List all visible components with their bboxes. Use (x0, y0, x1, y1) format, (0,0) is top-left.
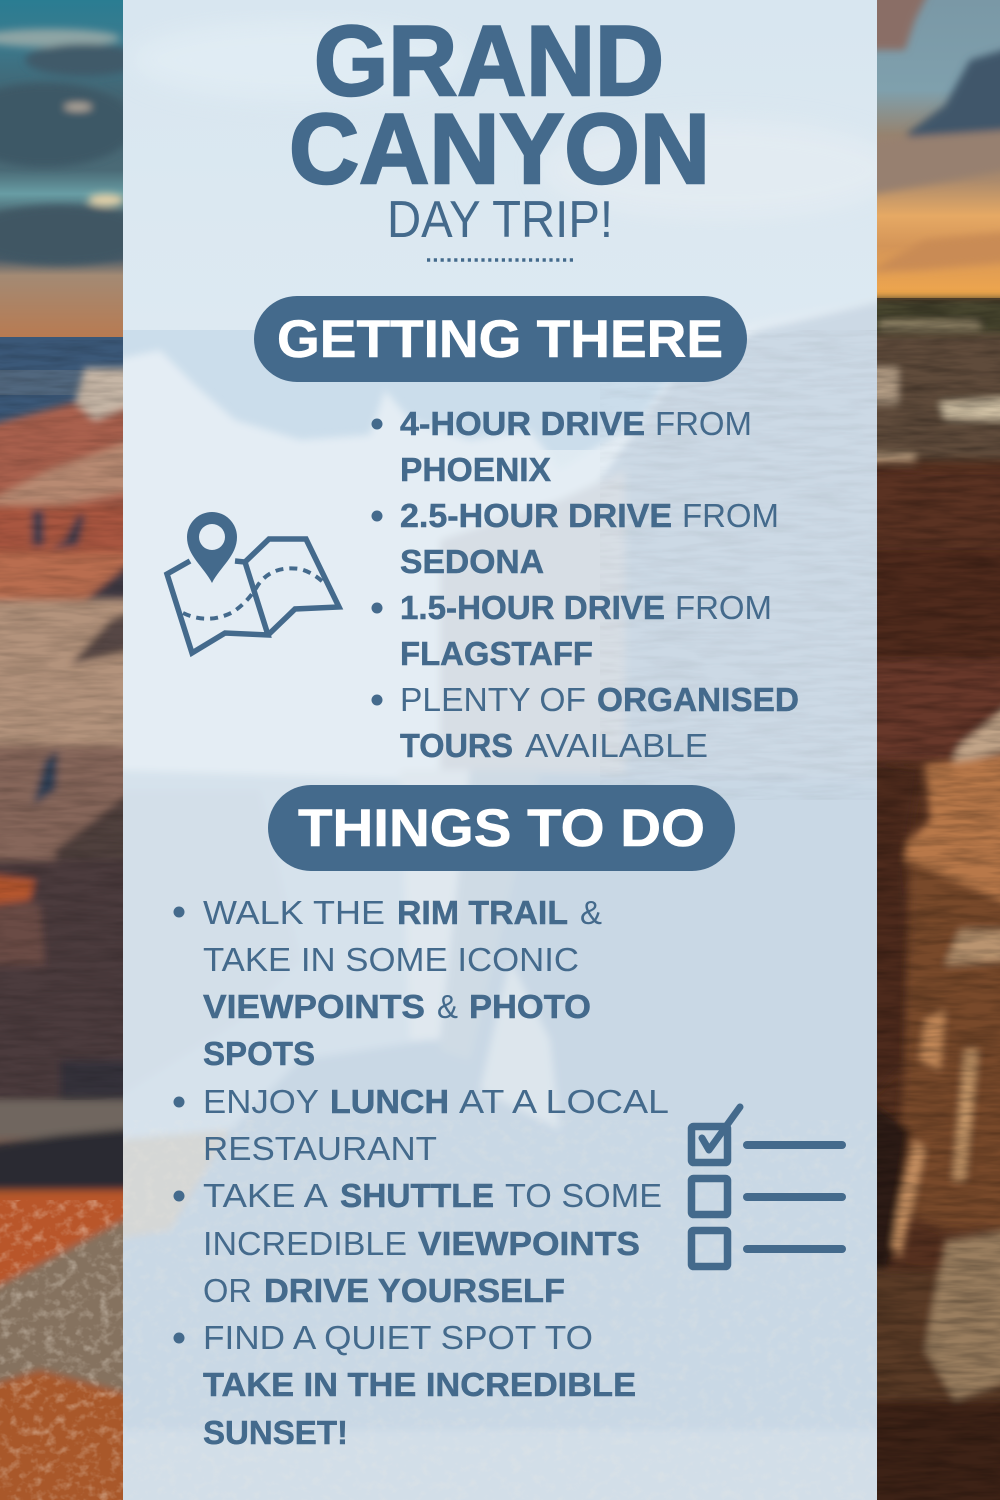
list: activities: DRIVE YOURSELF (264, 1272, 565, 1309)
list: activities: RESTAURANT (203, 1130, 437, 1167)
list: driving times (372, 405, 799, 764)
list: driving times: SEDONA (400, 543, 544, 580)
list: driving times: 4-HOUR DRIVE (400, 405, 645, 442)
list: driving times: AVAILABLE (525, 727, 708, 764)
title (289, 5, 710, 204)
photo strip: left canyon view (0, 0, 123, 1500)
title: CANYON (289, 93, 710, 204)
list: activities: SUNSET! (203, 1414, 348, 1451)
list: activities: TAKE IN THE INCREDIBLE (203, 1366, 636, 1403)
list: activities: RIM TRAIL (397, 894, 568, 931)
list: activities: TAKE IN SOME ICONIC (203, 941, 579, 978)
list: driving times: FROM (682, 497, 779, 534)
list: driving times: PHOENIX (400, 451, 551, 488)
dotted divider (427, 258, 574, 262)
list: driving times: 2.5-HOUR DRIVE (400, 497, 672, 534)
list: activities: VIEWPOINTS (203, 988, 425, 1025)
list: driving times: TOURS (400, 727, 513, 764)
list: activities: TO SOME (505, 1177, 662, 1214)
list: activities: FIND A QUIET SPOT TO (203, 1319, 593, 1356)
heading pill: getting there (254, 296, 747, 382)
list: driving times: 1.5-HOUR DRIVE (400, 589, 665, 626)
panel: things to do (174, 785, 842, 1451)
list: activities (174, 894, 669, 1451)
list: activities: & (580, 894, 602, 931)
heading pill: things to do (268, 785, 735, 871)
photo strip: right cliff face at sunset (867, 0, 1000, 1500)
heading pill: getting there: GETTING THERE (277, 310, 723, 369)
icon: checklist (692, 1107, 842, 1266)
list: activities: ENJOY (203, 1083, 319, 1120)
list: activities: PHOTO (469, 988, 591, 1025)
list: driving times: FROM (675, 589, 772, 626)
list: activities: & (437, 988, 458, 1025)
list: driving times: FROM (655, 405, 752, 442)
list: driving times: PLENTY OF (400, 681, 586, 718)
subtitle: DAY TRIP! (387, 191, 613, 249)
list: driving times: FLAGSTAFF (400, 635, 593, 672)
list: activities: OR (203, 1272, 252, 1309)
list: activities: VIEWPOINTS (418, 1225, 640, 1262)
list: activities: LUNCH (330, 1083, 449, 1120)
list: activities: SHUTTLE (340, 1177, 494, 1214)
list: activities: AT A LOCAL (459, 1083, 669, 1120)
icon: folded map with location pin (167, 512, 339, 653)
heading pill: things to do: THINGS TO DO (298, 799, 705, 858)
list: driving times: ORGANISED (597, 681, 799, 718)
list: activities: WALK THE (203, 894, 385, 931)
panel: translucent centre column with faded canyon (113, 0, 900, 1500)
list: activities: TAKE A (203, 1177, 328, 1214)
panel: getting there (167, 296, 799, 764)
list: activities: INCREDIBLE (203, 1225, 407, 1262)
list: activities: SPOTS (203, 1035, 315, 1072)
title: GRAND (314, 5, 664, 116)
